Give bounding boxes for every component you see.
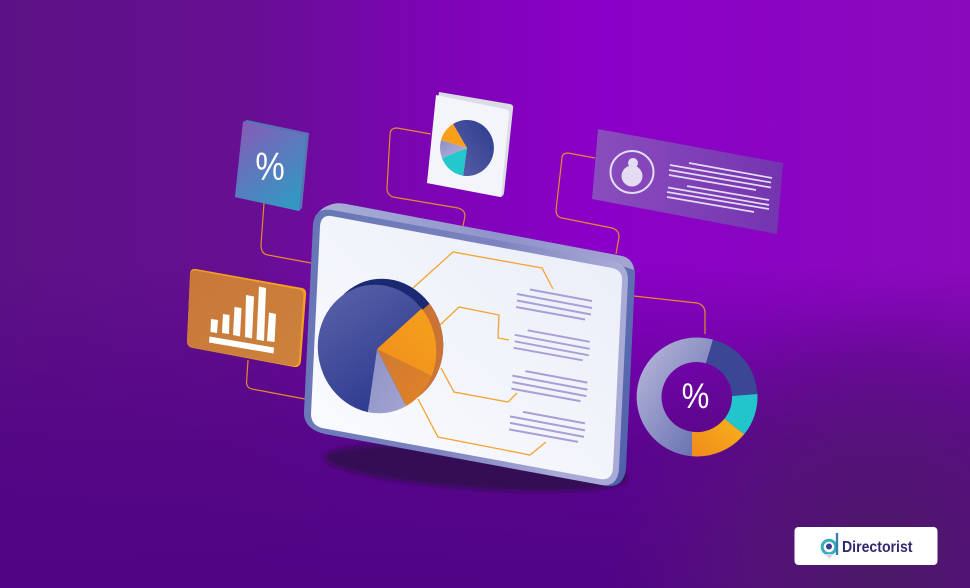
percent sign: %: [682, 377, 709, 417]
screen frame: [304, 210, 628, 485]
text lines: [667, 163, 772, 212]
small pie chart: [440, 120, 494, 176]
leader lines: [413, 252, 553, 455]
document card with pie: [427, 92, 513, 197]
text line groups: [509, 290, 592, 442]
Directorist logo badge: [794, 527, 938, 565]
monitor shadow: [323, 436, 629, 500]
pie slice: dark orange: [377, 349, 432, 406]
bar chart card: [187, 269, 306, 367]
avatar icon: [610, 151, 654, 193]
screen body side: [304, 203, 635, 486]
logo icon: [822, 533, 837, 559]
bars: [209, 286, 276, 354]
pie slice: blue: [318, 284, 422, 412]
logo wordmark: Directorist: [842, 539, 912, 556]
percent card: [235, 120, 309, 211]
presentation screen: [304, 203, 636, 486]
3D pie chart: [318, 278, 444, 414]
screen surface: [311, 216, 622, 479]
donut chart: [637, 338, 757, 457]
profile card: [592, 129, 783, 234]
connector lines between cards and screen: [246, 128, 705, 399]
pie slice: lilac: [368, 349, 406, 414]
pie slice: orange: [377, 308, 436, 376]
top rim: [315, 203, 634, 270]
percent sign: %: [255, 144, 285, 189]
